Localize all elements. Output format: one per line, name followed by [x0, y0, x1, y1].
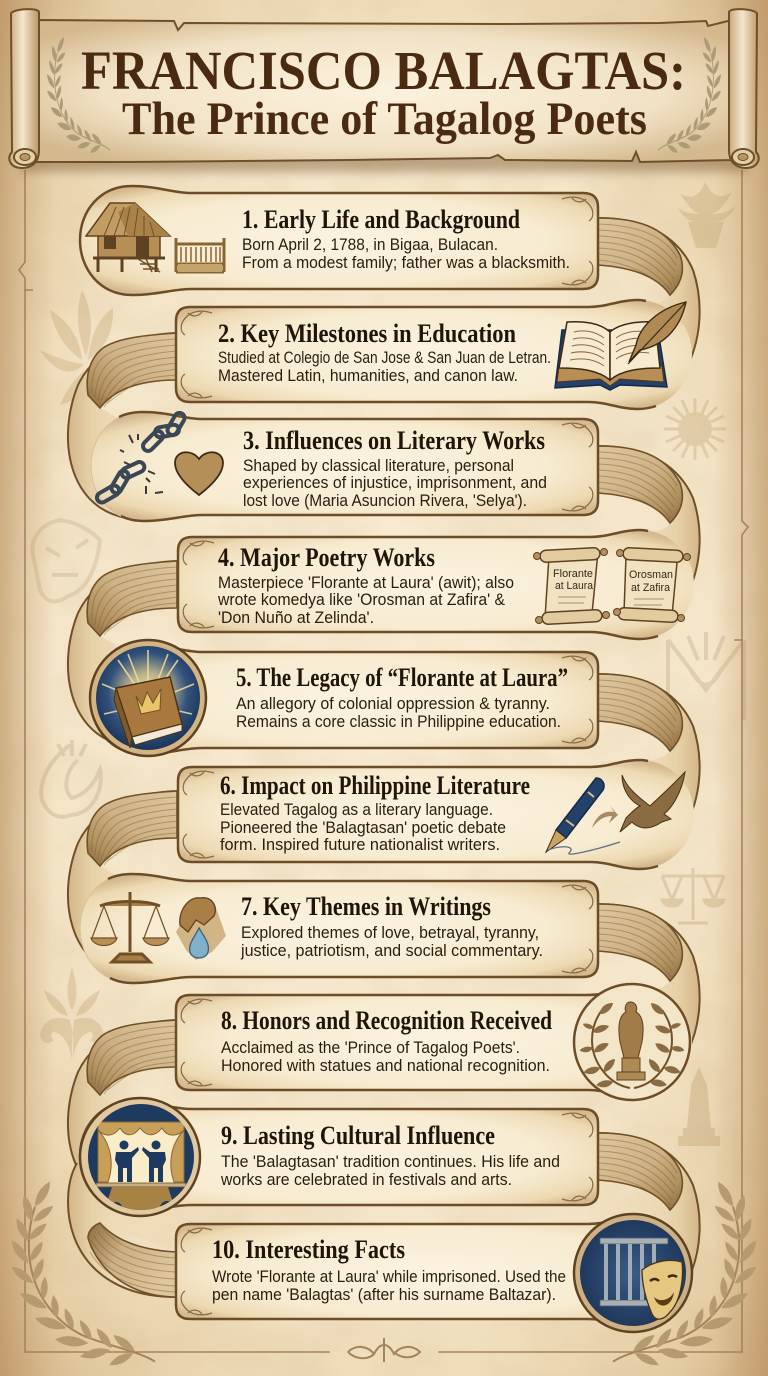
panel 1: early life	[80, 186, 598, 295]
background motif: scales	[662, 868, 724, 923]
icon: broken chains and heart	[95, 411, 223, 504]
panel 8: honors	[176, 984, 692, 1100]
body text: Wrote 'Florante at Laura' while imprisoned. Used the	[212, 1267, 566, 1286]
panel shape	[178, 760, 694, 869]
body text: pen name 'Balagtas' (after his surname Baltazar).	[212, 1285, 556, 1304]
banner parchment	[36, 20, 732, 162]
panel 4: major works	[178, 530, 694, 639]
icon: prison bars and mask medallion	[574, 1214, 692, 1332]
scroll: Florante at Laura: at Laura	[555, 580, 594, 592]
ribbon: 7 to 8	[598, 904, 700, 1093]
panel shape	[80, 186, 598, 295]
ribbon: 2 to 3	[68, 333, 190, 520]
heading: 3. Influences on Literary Works	[243, 426, 545, 455]
heading: 2. Key Milestones in Education	[218, 319, 516, 348]
panel corner curls	[562, 1113, 593, 1201]
body text: form. Inspired future nationalist writers.	[220, 835, 500, 854]
icon: statue in wreath	[574, 984, 690, 1100]
banner laurel right	[658, 36, 722, 155]
ribbon: 9 to 10 right	[598, 1133, 700, 1322]
panel corner curls	[562, 656, 593, 743]
ribbon: 4 to 5	[68, 561, 190, 748]
title line 2: The Prince of Tagalog Poets	[122, 93, 647, 145]
panel shape	[80, 1102, 598, 1211]
icon: theatre stage medallion	[80, 1098, 200, 1216]
body text	[236, 694, 561, 731]
body text: works are celebrated in festivals and arts.	[220, 1170, 512, 1189]
heading: 4. Major Poetry Works	[218, 543, 435, 572]
icon: nipa hut and cradle	[86, 203, 224, 272]
panel shape	[178, 530, 694, 639]
panel shape	[176, 300, 692, 409]
right scroll roll	[729, 9, 759, 168]
icon: crowned book medallion	[90, 640, 206, 756]
panel corner curls	[562, 423, 593, 511]
panel corner curls	[181, 311, 212, 398]
ribbon: 6 to 7	[68, 791, 190, 978]
body text: justice, patriotism, and social commentary.	[240, 941, 543, 960]
panel 3: influences	[91, 411, 598, 521]
icon: two scrolls	[534, 547, 690, 625]
body text: Acclaimed as the 'Prince of Tagalog Poets'.	[221, 1038, 520, 1057]
panel shape	[91, 412, 598, 521]
panel 7: themes	[80, 874, 598, 983]
scroll: Orosman at Zafira: at Zafira	[631, 582, 671, 594]
body text: wrote komedya like 'Orosman at Zafira' &	[217, 590, 506, 609]
heading: 10. Interesting Facts	[212, 1235, 405, 1264]
body text: From a modest family; father was a blacksmith.	[242, 253, 570, 272]
body text: 'Don Nuño at Zelinda'.	[218, 608, 374, 627]
body text: Elevated Tagalog as a literary language.	[220, 800, 493, 819]
icon: fountain pen and dove	[546, 772, 685, 854]
heading: 8. Honors and Recognition Received	[221, 1006, 552, 1035]
body text	[220, 800, 506, 854]
ribbon: 3 to 4	[598, 446, 700, 635]
scroll: Orosman at Zafira	[614, 547, 690, 623]
title line 1: FRANCISCO BALAGTAS:	[81, 40, 686, 101]
panel corner curls	[562, 197, 593, 285]
panel corner curls	[183, 771, 214, 858]
background motif: sun	[664, 398, 726, 460]
panel shape	[80, 874, 598, 983]
body text: The 'Balagtasan' tradition continues. His life and	[221, 1152, 560, 1171]
scroll: Florante at Laura: Florante	[553, 568, 593, 580]
body text	[212, 1267, 566, 1304]
banner shadow	[20, 40, 748, 172]
heading: 9. Lasting Cultural Influence	[221, 1121, 495, 1150]
body text	[221, 1038, 550, 1075]
panel shape	[91, 645, 598, 754]
body text	[218, 348, 551, 385]
body text: Born April 2, 1788, in Bigaa, Bulacan.	[242, 235, 498, 254]
scroll: Florante at Laura	[534, 547, 610, 625]
laurel: bottom right	[613, 1179, 760, 1369]
frame ornament: bottom centre	[348, 1338, 420, 1362]
heading: 7. Key Themes in Writings	[241, 892, 491, 921]
panel corner curls	[181, 999, 212, 1086]
panel 9: cultural influence	[80, 1098, 598, 1216]
background motif: banner emblem	[668, 632, 744, 720]
body text: Mastered Latin, humanities, and canon law.	[218, 366, 518, 385]
body text: lost love (Maria Asuncion Rivera, 'Selya').	[243, 491, 527, 510]
chain lower	[95, 460, 146, 504]
body text: Pioneered the 'Balagtasan' poetic debate	[220, 818, 506, 837]
background motif: obelisk	[678, 1067, 720, 1146]
panel 6: impact	[178, 760, 694, 869]
background motif: fleur	[40, 968, 104, 1060]
panel 2: education	[176, 300, 692, 409]
background motif: swan wing	[41, 740, 101, 817]
panel corner curls	[562, 885, 593, 973]
body text	[217, 573, 514, 627]
panel 10: interesting facts	[176, 1214, 692, 1332]
body text	[242, 235, 570, 272]
body text: An allegory of colonial oppression & tyranny.	[236, 694, 550, 713]
banner laurel left	[46, 36, 110, 155]
ribbon: 8 to 9	[68, 1020, 190, 1207]
left scroll roll	[9, 9, 39, 168]
body text: Studied at Colegio de San Jose & San Juan de Letran.	[218, 348, 551, 367]
ribbon: 9 to 10 left	[68, 1163, 176, 1297]
body text	[220, 1152, 560, 1189]
heading: 5. The Legacy of “Florante at Laura”	[236, 663, 568, 692]
icon: open book and quill	[555, 302, 686, 390]
body text: Honored with statues and national recognition.	[221, 1056, 550, 1075]
panel shape	[176, 988, 692, 1097]
body text: Masterpiece 'Florante at Laura' (awit); also	[218, 573, 514, 592]
body text	[243, 456, 547, 510]
heading: 1. Early Life and Background	[242, 205, 520, 234]
body text: Remains a core classic in Philippine education.	[236, 712, 561, 731]
panel shape	[176, 1217, 692, 1326]
background motif: plant	[678, 182, 736, 248]
laurel: bottom left	[8, 1179, 155, 1369]
title banner	[9, 9, 759, 172]
body text: experiences of injustice, imprisonment, and	[243, 473, 547, 492]
ribbon: 1 to 2	[598, 218, 700, 407]
body text: Shaped by classical literature, personal	[243, 456, 514, 475]
heading: 6. Impact on Philippine Literature	[220, 771, 530, 800]
chain upper	[141, 411, 186, 453]
body text: Explored themes of love, betrayal, tyranny,	[241, 923, 539, 942]
panel corner curls	[183, 541, 214, 628]
background motif: mask shield	[32, 520, 100, 601]
body text	[240, 923, 543, 960]
ribbon: 5 to 6	[598, 674, 700, 863]
panel 5: legacy	[90, 640, 598, 756]
panel corner curls	[181, 1228, 212, 1315]
icon: scales and clasped hands	[91, 892, 226, 962]
background motif: fan leaf	[40, 290, 113, 405]
scroll: Orosman at Zafira: Orosman	[629, 569, 673, 581]
